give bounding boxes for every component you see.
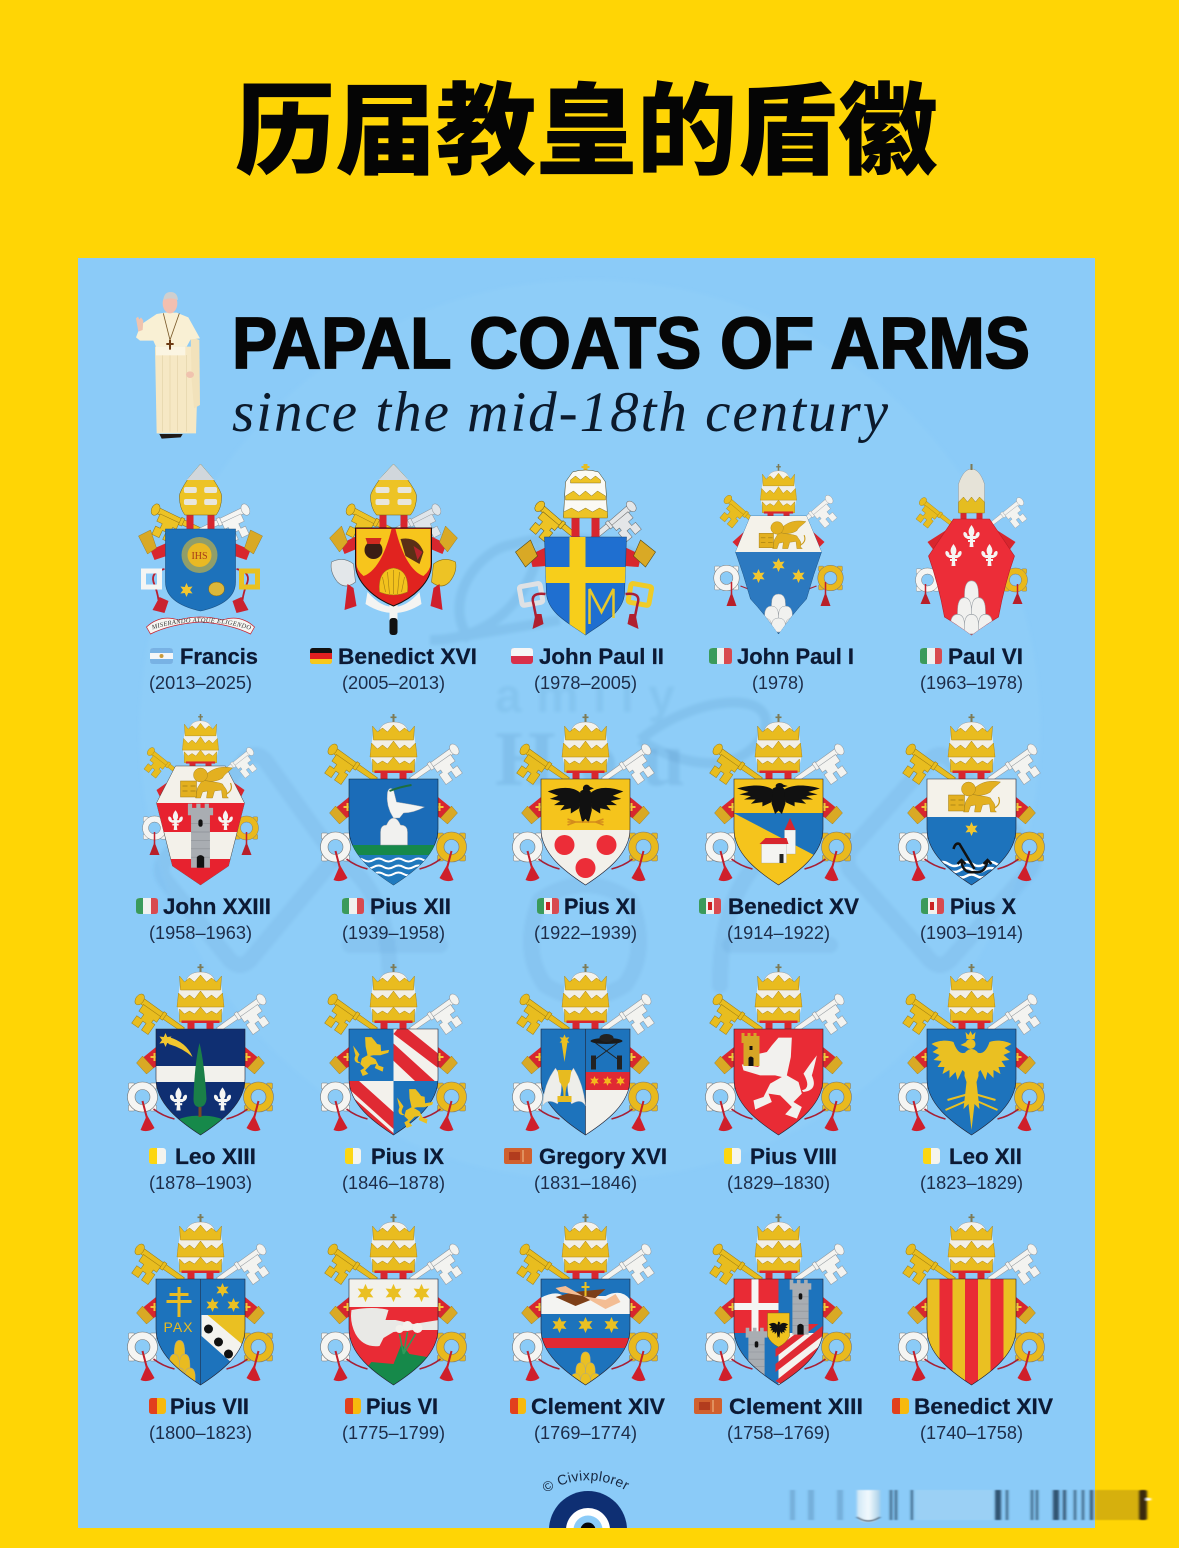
name: John XXIII xyxy=(163,894,271,919)
watermark: Hou xyxy=(495,715,685,802)
crest: Clement XIV xyxy=(508,1214,663,1386)
reign years: (1978) xyxy=(752,673,804,693)
crest: John Paul II xyxy=(516,464,656,636)
entry: Clement XIII xyxy=(694,1214,863,1443)
crest: Pius VII xyxy=(123,1214,278,1385)
crest: Pius XII xyxy=(316,714,471,887)
crest: Paul VI xyxy=(909,464,1034,635)
entry: Benedict XVI xyxy=(310,464,477,693)
crest: Francis xyxy=(138,464,263,634)
reign years: (1922–1939) xyxy=(534,923,637,943)
icon: evil eye logo xyxy=(549,1491,627,1528)
crest: Francis: MISERANDO ATQUE ELIGENDO xyxy=(152,618,252,630)
entry: Pius VIII xyxy=(701,964,856,1193)
flag: Papal States xyxy=(504,1148,532,1164)
crest: Benedict XVI xyxy=(330,464,458,635)
flag: Poland xyxy=(511,648,533,664)
name: John Paul II xyxy=(539,644,664,669)
name: Benedict XIV xyxy=(914,1394,1053,1419)
entry: Gregory XVI xyxy=(504,964,667,1193)
entry: John Paul II xyxy=(511,464,664,693)
crest: Gregory XVI xyxy=(508,964,663,1136)
name: Pius VI xyxy=(366,1394,438,1419)
reign years: (1978–2005) xyxy=(534,673,637,693)
reign years: (1823–1829) xyxy=(920,1173,1023,1193)
reign years: (1914–1922) xyxy=(727,923,830,943)
watermark: amily xyxy=(495,670,675,723)
name: Benedict XVI xyxy=(338,644,477,669)
name: Pius VIII xyxy=(750,1144,837,1169)
name: Pius VII xyxy=(170,1394,249,1419)
flag: Vatican xyxy=(923,1148,940,1164)
name: Gregory XVI xyxy=(539,1144,667,1169)
reign years: (1939–1958) xyxy=(342,923,445,943)
reign years: (1800–1823) xyxy=(149,1423,252,1443)
entry: Francis xyxy=(138,464,263,693)
watermark xyxy=(140,280,1040,1180)
reign years: (1958–1963) xyxy=(149,923,252,943)
crest: Francis: IHS xyxy=(191,551,208,562)
crest: Pius VI xyxy=(316,1214,471,1389)
name: Leo XII xyxy=(949,1144,1022,1169)
name: Benedict XV xyxy=(728,894,859,919)
name: Leo XIII xyxy=(175,1144,256,1169)
crest: Leo XII xyxy=(894,964,1049,1135)
name: Pius XI xyxy=(564,894,636,919)
crest: Pius VII: PAX xyxy=(164,1319,193,1335)
entry: Pius IX xyxy=(316,964,471,1193)
name: Pius XII xyxy=(370,894,451,919)
crest: Pius IX xyxy=(316,964,471,1142)
reign years: (1769–1774) xyxy=(534,1423,637,1443)
reign years: (1963–1978) xyxy=(920,673,1023,693)
flag: Papal Legations xyxy=(892,1398,909,1414)
heading: PAPAL COATS OF ARMS xyxy=(232,304,1030,384)
flag: Kingdom of Italy xyxy=(537,898,559,914)
reign years: (2013–2025) xyxy=(149,673,252,693)
reign years: (1903–1914) xyxy=(920,923,1023,943)
entry: Paul VI xyxy=(909,464,1034,693)
panel: coats of arms xyxy=(78,258,1095,1528)
entry: Leo XII xyxy=(894,964,1049,1193)
entry: Leo XIII xyxy=(123,964,278,1193)
subheading: since the mid-18th century xyxy=(232,381,889,444)
crest: Benedict XV xyxy=(701,714,856,885)
name: Clement XIV xyxy=(531,1394,665,1419)
name: Pius IX xyxy=(371,1144,444,1169)
icon: pope figure xyxy=(136,292,200,439)
crest: John XXIII xyxy=(137,714,264,889)
crest: Leo XIII xyxy=(123,964,278,1139)
crest: Pius XI xyxy=(508,714,663,885)
flag: Vatican xyxy=(345,1148,361,1164)
entry: Pius XII xyxy=(316,714,471,943)
flag: Italy xyxy=(920,648,942,664)
flag: Kingdom of Italy xyxy=(699,898,721,914)
watermark streaks xyxy=(790,1490,1151,1522)
reign years: (1829–1830) xyxy=(727,1173,830,1193)
name: Pius X xyxy=(950,894,1016,919)
flag: Italy xyxy=(136,898,158,914)
flag: Vatican xyxy=(724,1148,741,1164)
crest: John Paul I xyxy=(713,464,844,634)
reign years: (1878–1903) xyxy=(149,1173,252,1193)
reign years: (1775–1799) xyxy=(342,1423,445,1443)
flag: Argentina xyxy=(150,648,173,664)
flag: Papal Legations xyxy=(149,1398,166,1414)
entry: Pius VII xyxy=(123,1214,278,1443)
entry: Pius VI xyxy=(316,1214,471,1443)
flag: Vatican xyxy=(149,1148,166,1164)
entry: Benedict XIV xyxy=(892,1214,1053,1443)
name: Paul VI xyxy=(948,644,1023,669)
reign years: (1758–1769) xyxy=(727,1423,830,1443)
name: Clement XIII xyxy=(729,1394,863,1419)
reign years: (1831–1846) xyxy=(534,1173,637,1193)
flag: Italy xyxy=(342,898,364,914)
entry: Clement XIV xyxy=(508,1214,665,1443)
reign years: (1846–1878) xyxy=(342,1173,445,1193)
flag: Papal Legations xyxy=(345,1398,361,1414)
reign years: (1740–1758) xyxy=(920,1423,1023,1443)
entry: Pius XI xyxy=(508,714,663,943)
entry: John Paul I xyxy=(709,464,854,693)
crest: Clement XIII xyxy=(701,1214,856,1388)
flag: Germany xyxy=(310,648,332,664)
reign years: (2005–2013) xyxy=(342,673,445,693)
crest: Pius VIII xyxy=(701,964,856,1135)
name: Francis xyxy=(180,644,258,669)
flag: Italy xyxy=(709,648,732,664)
crest: Pius X xyxy=(894,714,1049,885)
flag: Papal States xyxy=(694,1398,722,1414)
entry: Benedict XV xyxy=(699,714,859,943)
title: 历届教皇的盾徽 xyxy=(235,50,938,195)
name: John Paul I xyxy=(737,644,854,669)
flag: Kingdom of Italy xyxy=(921,898,944,914)
flag: Papal Legations xyxy=(510,1398,526,1414)
entry: John XXIII xyxy=(136,714,271,943)
credit: Civixplorer: © Civixplorer xyxy=(543,1470,630,1491)
crest: Benedict XIV xyxy=(894,1214,1049,1387)
entry: Pius X xyxy=(894,714,1049,943)
